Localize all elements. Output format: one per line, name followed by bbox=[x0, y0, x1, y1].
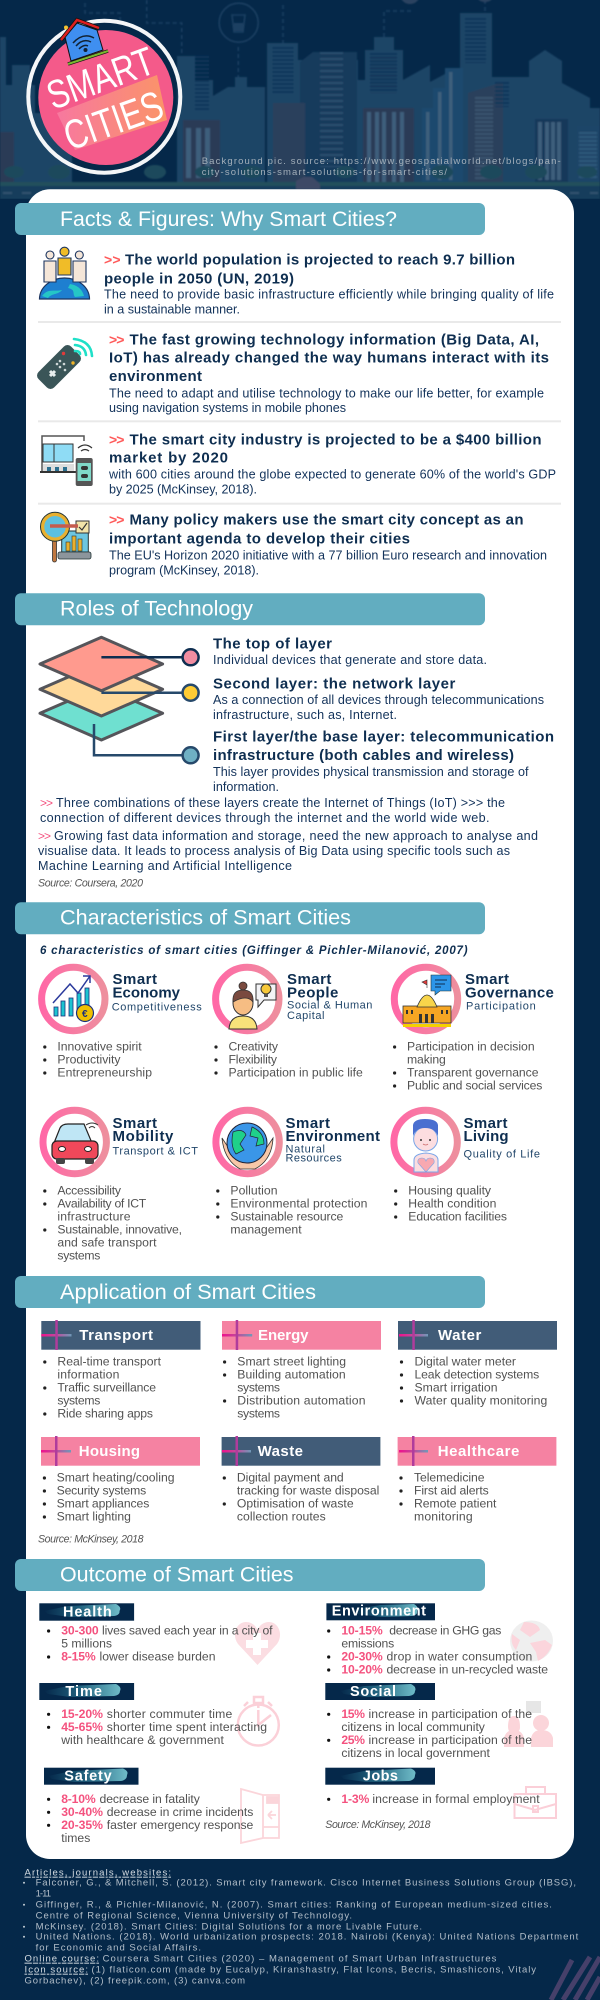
footer references: Falconer, G., & Mitchell, S. (2012). Smart city framework. Cisco Internet Business Solutions Group (IBSG), bbox=[36, 1878, 576, 1889]
layer descriptions: The top of layer bbox=[213, 635, 332, 652]
list: time: 15-20% bbox=[61, 1707, 103, 1721]
icon: smart devices bbox=[40, 436, 93, 486]
footer references: 1-11 bbox=[36, 1888, 51, 1899]
fact 2 text: using navigation systems in mobile phones bbox=[109, 401, 346, 415]
card: smart mobility: Smart bbox=[112, 1115, 157, 1132]
tag: environment: Environment bbox=[332, 1604, 426, 1620]
list: safety: faster emergency response bbox=[107, 1818, 254, 1832]
card: smart governance: Participation bbox=[466, 1001, 536, 1013]
tag: waste bbox=[222, 1436, 380, 1466]
layer descriptions: infrastructure, such as, Internet. bbox=[213, 708, 397, 722]
tag: energy bbox=[222, 1320, 381, 1350]
list: mobility: and safe transport bbox=[57, 1236, 157, 1250]
heading: application bbox=[15, 1276, 485, 1308]
list: health bbox=[47, 1624, 273, 1664]
card: smart economy: € bbox=[82, 1009, 88, 1020]
background picture source caption: city-solutions-smart-solutions-for-smart-cities/ bbox=[202, 167, 447, 178]
tag: water bbox=[398, 1320, 557, 1350]
list: health: lives saved each year in a city of bbox=[102, 1624, 273, 1638]
diagram: three stacked layers bbox=[40, 637, 199, 763]
card: smart governance: Governance bbox=[465, 984, 554, 1001]
card: smart governance: Smart bbox=[465, 971, 509, 988]
list: mobility: infrastructure bbox=[57, 1210, 131, 1224]
list: health: 30-300 bbox=[61, 1624, 99, 1638]
footer references bbox=[23, 1868, 579, 1987]
list: energy: Distribution automation bbox=[237, 1394, 366, 1408]
list: environment: 20-30% bbox=[341, 1650, 383, 1664]
list: jobs: 1-3% bbox=[341, 1792, 369, 1806]
card: smart mobility: Mobility bbox=[112, 1128, 174, 1145]
list: healthcare: First aid alerts bbox=[414, 1484, 489, 1498]
section: roles of technology bbox=[15, 593, 554, 890]
fact 3 text: The smart city industry is projected to be a $400 billion bbox=[130, 431, 542, 448]
paragraph: internet of things: connection of different devices through the internet and the world wide web. bbox=[40, 811, 489, 825]
list: healthcare: Remote patient bbox=[414, 1497, 497, 1511]
list: people: Participation in public life bbox=[228, 1066, 363, 1080]
tag: waste: Waste bbox=[258, 1443, 303, 1460]
list: transport: Traffic surveillance bbox=[57, 1381, 156, 1395]
card: smart people bbox=[216, 967, 372, 1031]
list: healthcare: monitoring bbox=[414, 1510, 473, 1524]
fact 4 text: important agenda to develop their cities bbox=[109, 530, 410, 547]
footer references: United Nations. (2018). World urbanization prospects: 2018. Nairobi (Kenya): United Nations Department bbox=[36, 1932, 579, 1943]
list: health: lower disease burden bbox=[100, 1650, 216, 1664]
fact 3 text: with 600 cities around the globe expected to generate 60% of the world's GDP bbox=[108, 467, 556, 481]
tag: health bbox=[39, 1603, 134, 1621]
list: energy: Smart street lighting bbox=[237, 1355, 346, 1369]
list: governance bbox=[393, 1040, 542, 1093]
list: water: Smart irrigation bbox=[414, 1381, 498, 1395]
card: smart people: Social & Human bbox=[287, 1000, 372, 1012]
list: transport: systems bbox=[57, 1394, 100, 1408]
footer references: for Economic and Social Affairs. bbox=[36, 1943, 201, 1954]
heading: application: Application of Smart Cities bbox=[60, 1281, 316, 1304]
tag: health: Health bbox=[63, 1605, 112, 1621]
tag: healthcare bbox=[398, 1436, 556, 1466]
paragraph: internet of things: >> bbox=[40, 796, 53, 810]
footer references: Online course: bbox=[24, 1954, 99, 1965]
fact 3 text bbox=[108, 431, 556, 496]
heading: outcome bbox=[15, 1559, 485, 1591]
fact 2 text bbox=[109, 331, 549, 415]
list: time: with healthcare & government bbox=[60, 1733, 225, 1747]
list: living: Health condition bbox=[408, 1197, 496, 1211]
footer references: McKinsey. (2018). Smart Cities: Digital Solutions for a more Livable Future. bbox=[36, 1922, 422, 1933]
list: safety: decrease in fatality bbox=[100, 1792, 201, 1806]
tag: energy: Energy bbox=[258, 1327, 309, 1344]
section: outcome bbox=[15, 1559, 556, 1845]
paragraph: big data: Growing fast data information and storage, need the new approach to analyse and bbox=[54, 829, 538, 843]
tag: transport: Transport bbox=[79, 1327, 153, 1344]
list: environment: Pollution bbox=[230, 1184, 278, 1198]
fact 1 text: The need to provide basic infrastructure efficiently while bringing quality of life bbox=[104, 287, 554, 301]
card: smart mobility: Transport & ICT bbox=[112, 1146, 198, 1158]
list: social bbox=[327, 1707, 532, 1760]
card: smart environment: Natural bbox=[286, 1144, 325, 1156]
list: healthcare: Telemedicine bbox=[414, 1471, 485, 1485]
paragraph: big data: >> bbox=[38, 829, 51, 843]
section: application bbox=[15, 1276, 557, 1546]
list: time: 45-65% bbox=[61, 1720, 103, 1734]
fact 1 text: The world population is projected to reach 9.7 billion bbox=[125, 251, 515, 268]
icon: people on a globe bbox=[40, 247, 90, 299]
list: social: 15% bbox=[341, 1707, 365, 1721]
list: safety: 30-40% bbox=[61, 1805, 103, 1819]
list: environment: decrease in GHG gas bbox=[389, 1624, 501, 1638]
list: governance: Participation in decision bbox=[407, 1040, 535, 1054]
background picture source caption bbox=[202, 156, 561, 178]
list: water: Digital water meter bbox=[414, 1355, 516, 1369]
list: mobility: Accessibility bbox=[57, 1184, 122, 1198]
list: time: shorter commuter time bbox=[107, 1707, 233, 1721]
card: smart people: Smart bbox=[287, 971, 331, 988]
layer descriptions: As a connection of all devices through telecommunications bbox=[213, 693, 544, 707]
watermark icon: globe bbox=[510, 1620, 553, 1662]
tag: social bbox=[325, 1683, 435, 1700]
list: safety: times bbox=[61, 1831, 90, 1845]
list: water: Leak detection systems bbox=[414, 1368, 539, 1382]
list: housing: Smart lighting bbox=[57, 1510, 131, 1524]
footer references: Giffinger, R., & Pichler-Milanović, N. (2007). Smart cities: Ranking of European medium-sized cities. bbox=[36, 1900, 552, 1911]
tag: safety: Safety bbox=[64, 1769, 112, 1785]
fact 1 text: people in 2050 (UN, 2019) bbox=[104, 270, 294, 287]
source note: Source: McKinsey, 2018 bbox=[325, 1819, 431, 1831]
list: governance: Transparent governance bbox=[407, 1066, 539, 1080]
list: safety bbox=[47, 1792, 254, 1845]
fact 4 text bbox=[109, 511, 547, 577]
card: smart mobility bbox=[43, 1110, 198, 1174]
list: waste: Digital payment and bbox=[237, 1471, 344, 1485]
watermark icon: briefcase bbox=[514, 1787, 556, 1818]
list: social: citizens in local government bbox=[341, 1746, 491, 1760]
card: smart governance bbox=[394, 967, 554, 1031]
tag: water: Water bbox=[438, 1327, 482, 1344]
tag: healthcare: Healthcare bbox=[438, 1443, 519, 1460]
list: social: increase in participation of the bbox=[368, 1733, 532, 1747]
list: housing: Smart appliances bbox=[57, 1497, 149, 1511]
list: economy: Innovative spirit bbox=[57, 1040, 142, 1054]
card: smart living: Living bbox=[464, 1128, 509, 1145]
list: housing: Security systems bbox=[57, 1484, 146, 1498]
fact 4 text: program (McKinsey, 2018). bbox=[109, 563, 259, 577]
list: mobility: Sustainable, innovative, bbox=[57, 1223, 182, 1237]
layer descriptions: First layer/the base layer: telecommunication bbox=[213, 728, 554, 745]
fact 2 text: IoT) has already changed the way humans interact with its bbox=[109, 350, 549, 367]
list: mobility bbox=[43, 1184, 182, 1263]
heading: roles of technology: Roles of Technology bbox=[60, 598, 254, 621]
fact 1 text: >> bbox=[104, 251, 120, 267]
list: jobs: increase in formal employment bbox=[372, 1792, 540, 1806]
tag: housing: Housing bbox=[79, 1443, 140, 1460]
list: living: Housing quality bbox=[408, 1184, 492, 1198]
fact 4 text: >> bbox=[109, 511, 124, 527]
list: time bbox=[47, 1707, 267, 1747]
tag: time: Time bbox=[65, 1684, 102, 1700]
fact 2 text: >> bbox=[109, 331, 124, 347]
list: social: increase in participation of the bbox=[368, 1707, 532, 1721]
card: smart economy: Smart bbox=[112, 971, 157, 988]
layer descriptions: Individual devices that generate and store data. bbox=[213, 653, 487, 667]
list: energy: Building automation bbox=[237, 1368, 346, 1382]
fact 1 text: in a sustainable manner. bbox=[104, 302, 240, 316]
section: facts and figures bbox=[15, 203, 561, 577]
list: waste: Optimisation of waste bbox=[237, 1497, 354, 1511]
main white panel bbox=[26, 189, 574, 1859]
list: waste bbox=[223, 1471, 379, 1524]
tag: jobs: Jobs bbox=[363, 1769, 398, 1785]
card: smart environment: Resources bbox=[286, 1153, 342, 1165]
icon: data analysis bbox=[40, 512, 91, 562]
list: environment: emissions bbox=[341, 1637, 394, 1651]
card: smart people: Capital bbox=[287, 1010, 324, 1022]
footer references: Articles, journals, websites: bbox=[24, 1868, 171, 1879]
footer references: Coursera Smart Cities (2020) – Management of Smart Urban Infrastructures bbox=[103, 1954, 497, 1965]
fact 4 text: Many policy makers use the smart city concept as an bbox=[130, 511, 524, 528]
logo: smart cities badge bbox=[28, 20, 180, 173]
card: smart people: People bbox=[287, 984, 338, 1001]
heading: characteristics bbox=[15, 902, 485, 934]
card: smart economy: Economy bbox=[112, 984, 181, 1001]
list: environment: 10-20% bbox=[341, 1663, 383, 1677]
list: people: Flexibility bbox=[228, 1053, 278, 1067]
list: transport bbox=[43, 1355, 162, 1421]
watermark icon: heart bbox=[235, 1622, 280, 1665]
paragraph: big data: visualise data. It leads to process analysis of Big Data using specific tools such as bbox=[38, 844, 510, 858]
list: environment: management bbox=[230, 1223, 302, 1237]
list: housing: Smart heating/cooling bbox=[57, 1471, 174, 1485]
list: environment: Sustainable resource bbox=[230, 1210, 344, 1224]
list: health: 8-15% bbox=[61, 1650, 96, 1664]
card: smart economy: Competitiveness bbox=[112, 1002, 202, 1014]
list: environment bbox=[216, 1184, 367, 1237]
background picture source caption: Background pic. source: https://www.geospatialworld.net/blogs/pan- bbox=[202, 156, 561, 167]
watermark icon: citizens bbox=[504, 1701, 553, 1747]
fact 2 text: The need to adapt and utilise technology to make our life better, for example bbox=[109, 386, 544, 400]
footer references: Centre of Regional Science, Vienna University of Technology. bbox=[36, 1911, 352, 1922]
tag: time bbox=[39, 1683, 134, 1700]
tag: jobs bbox=[325, 1768, 435, 1785]
layer descriptions bbox=[213, 635, 554, 794]
tag: safety bbox=[44, 1768, 138, 1785]
subheading: 6 characteristics of smart cities (Giffinger & Pichler-Milanović, 2007) bbox=[40, 945, 468, 957]
source note: Source: McKinsey, 2018 bbox=[38, 1534, 144, 1546]
list: safety: decrease in crime incidents bbox=[107, 1805, 253, 1819]
background city skyline bbox=[0, 0, 600, 199]
list: living: Education facilities bbox=[408, 1210, 507, 1224]
heading: facts and figures bbox=[15, 203, 485, 235]
list: environment bbox=[327, 1624, 548, 1677]
list: people: Creativity bbox=[228, 1040, 279, 1054]
fact 3 text: by 2025 (McKinsey, 2018). bbox=[109, 482, 257, 496]
card: smart economy bbox=[42, 967, 202, 1031]
list: energy bbox=[223, 1355, 366, 1421]
list: environment: decrease in un-recycled waste bbox=[386, 1663, 548, 1677]
list: time: shorter time spent interacting bbox=[107, 1720, 267, 1734]
fact 3 text: market by 2020 bbox=[109, 449, 228, 466]
paragraph: big data bbox=[38, 829, 538, 873]
list: governance: making bbox=[407, 1053, 446, 1067]
list: social: 25% bbox=[341, 1733, 365, 1747]
list: energy: systems bbox=[237, 1381, 280, 1395]
heading: outcome: Outcome of Smart Cities bbox=[60, 1564, 294, 1587]
list: environment: Environmental protection bbox=[230, 1197, 367, 1211]
list: transport: Ride sharing apps bbox=[57, 1407, 153, 1421]
card: smart living: Smart bbox=[464, 1115, 508, 1132]
layer descriptions: information. bbox=[213, 780, 279, 794]
list: environment: drop in water consumption bbox=[386, 1650, 532, 1664]
card: smart living bbox=[394, 1110, 540, 1174]
heading: roles of technology bbox=[15, 593, 485, 625]
tag: social: Social bbox=[350, 1684, 396, 1700]
list: water bbox=[400, 1355, 547, 1408]
list: waste: collection routes bbox=[237, 1510, 326, 1524]
heading: facts and figures: Facts & Figures: Why Smart Cities? bbox=[60, 208, 397, 231]
list: transport: information bbox=[57, 1368, 119, 1382]
heading: characteristics: Characteristics of Smart Cities bbox=[60, 906, 351, 929]
paragraph: internet of things: Three combinations of these layers create the Internet of Things (IoT) >>> the bbox=[56, 796, 505, 810]
layer descriptions: infrastructure (both cables and wireless) bbox=[213, 747, 514, 764]
footer references: Gorbachev), (2) freepik.com, (3) canva.com bbox=[24, 1976, 245, 1987]
card: smart living: Quality of Life bbox=[464, 1149, 540, 1161]
list: safety: 20-35% bbox=[61, 1818, 103, 1832]
list: economy bbox=[43, 1040, 152, 1080]
card: smart environment: Smart bbox=[286, 1115, 330, 1132]
watermark icon: emergency door bbox=[241, 1789, 279, 1843]
fact 3 text: >> bbox=[109, 431, 124, 447]
tag: housing bbox=[41, 1436, 200, 1466]
list: transport: Real-time transport bbox=[57, 1355, 162, 1369]
list: health: 5 millions bbox=[61, 1637, 112, 1651]
tag: transport bbox=[41, 1320, 200, 1350]
paragraph: big data: Machine Learning and Artificial Intelligence bbox=[38, 859, 292, 873]
list: living bbox=[394, 1184, 507, 1224]
layer descriptions: This layer provides physical transmission and storage of bbox=[213, 765, 529, 779]
footer references: Icon source: bbox=[24, 1965, 88, 1976]
fact 1 text bbox=[104, 251, 554, 316]
card: smart environment bbox=[216, 1110, 380, 1174]
list: social: citizens in local community bbox=[341, 1720, 486, 1734]
list: healthcare bbox=[399, 1471, 497, 1524]
fact 4 text: The EU's Horizon 2020 initiative with a 77 billion Euro research and innovation bbox=[109, 548, 547, 562]
source note: Source: Coursera, 2020 bbox=[38, 878, 143, 890]
list: safety: 8-10% bbox=[61, 1792, 96, 1806]
paragraph: internet of things bbox=[40, 796, 505, 825]
footer references: (1) flaticon.com (made by Eucalyp, Kiranshastry, Flat Icons, Becris, Smashicons, Vitaly bbox=[92, 1965, 536, 1976]
section: characteristics bbox=[15, 902, 554, 1263]
list: water: Water quality monitoring bbox=[414, 1394, 547, 1408]
list: waste: tracking for waste disposal bbox=[237, 1484, 379, 1498]
fact 2 text: The fast growing technology information (Big Data, AI, bbox=[130, 331, 539, 348]
list: mobility: systems bbox=[57, 1249, 100, 1263]
card: smart environment: Environment bbox=[286, 1128, 380, 1145]
layer descriptions: Second layer: the network layer bbox=[213, 675, 456, 692]
list: environment: 10-15% bbox=[341, 1624, 383, 1638]
list: people bbox=[214, 1040, 363, 1080]
list: economy: Productivity bbox=[57, 1053, 121, 1067]
icon: remote control bbox=[35, 339, 92, 391]
list: energy: systems bbox=[237, 1407, 280, 1421]
logo: smart cities badge: SMART bbox=[41, 39, 160, 118]
list: mobility: Availability of ICT bbox=[57, 1197, 147, 1211]
list: governance: Public and social services bbox=[407, 1079, 542, 1093]
list: economy: Entrepreneurship bbox=[57, 1066, 152, 1080]
list: housing bbox=[43, 1471, 174, 1524]
logo: smart cities badge: CITIES bbox=[58, 82, 169, 159]
watermark icon: stopwatch bbox=[238, 1697, 279, 1746]
fact 2 text: environment bbox=[109, 368, 202, 385]
